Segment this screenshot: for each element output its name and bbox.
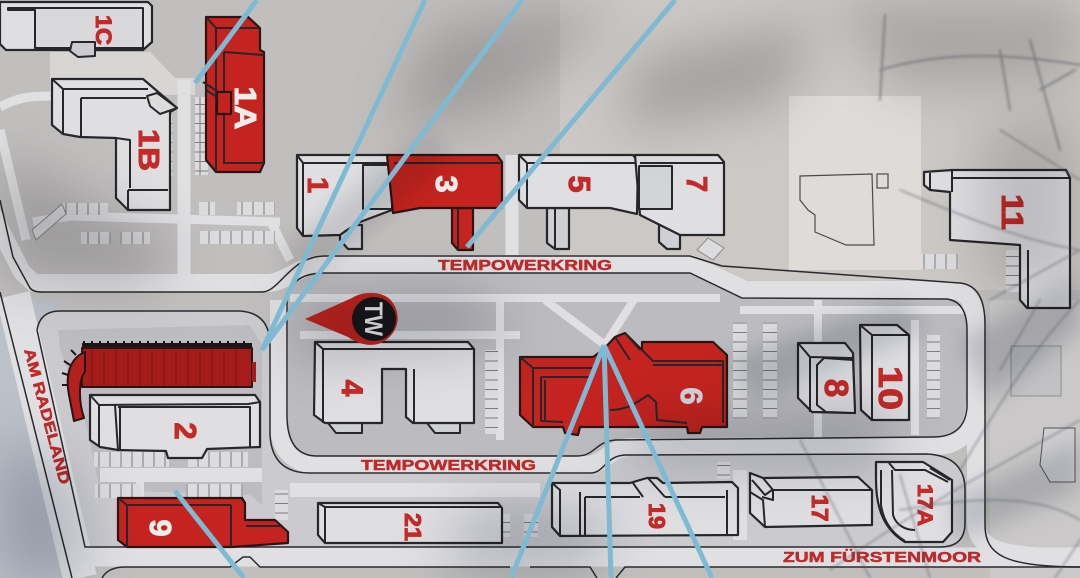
building 17A (876, 462, 952, 542)
building 1B: 1B (132, 129, 164, 171)
building 4: 4 (335, 380, 368, 397)
pointer line to long building, right (262, 0, 522, 350)
building 17 (750, 473, 872, 527)
building 3 (387, 155, 502, 250)
tree branch shadows (800, 15, 1080, 578)
building 8: 8 (818, 379, 855, 397)
building 10 (860, 325, 909, 420)
building 4 (314, 342, 474, 433)
building 1C (0, 2, 152, 57)
building 5 (519, 155, 638, 249)
pointer line to building 9 (175, 491, 244, 578)
outlined neighbouring building (800, 174, 888, 245)
building 1B (52, 79, 177, 210)
building 17A: 17A (913, 484, 936, 526)
building 9 (118, 498, 288, 547)
street label: Zum Fürstenmoor: ZUM FÜRSTENMOOR (783, 549, 981, 566)
building 1 (297, 155, 392, 249)
building 8 (798, 343, 855, 413)
building 1C: 1C (91, 15, 116, 45)
building 6 (520, 333, 727, 435)
building 1A (203, 17, 264, 172)
street label: Tempowerkring upper: TEMPOWERKRING (438, 257, 612, 274)
building 7 (635, 155, 724, 249)
street label: Tempowerkring lower: TEMPOWERKRING (361, 457, 536, 474)
light square plot (789, 96, 921, 270)
building 5: 5 (562, 175, 597, 193)
building 11 (924, 170, 1070, 308)
city blocks (37, 273, 967, 547)
building 17: 17 (807, 494, 833, 522)
building 1A: 1A (228, 86, 263, 130)
building 19 (552, 478, 738, 536)
pointer lines from building 6 (511, 345, 712, 578)
pointer line to 1A (195, 0, 257, 83)
building 6: 6 (674, 387, 709, 405)
building 21: 21 (400, 513, 426, 541)
red long building with teeth (62, 341, 256, 421)
parking bays (32, 97, 1021, 537)
road outlines (0, 200, 1080, 578)
location pin: TW (359, 302, 387, 336)
pointer line to long building, left (262, 0, 425, 350)
street label: Am Radeland: AM RADELAND (20, 347, 73, 486)
building 2 (90, 395, 260, 458)
side blocks at far right (1011, 346, 1075, 482)
building 1: 1 (301, 177, 333, 193)
location pin (305, 293, 398, 345)
building 10: 10 (872, 366, 909, 410)
building 7: 7 (680, 176, 712, 192)
building 21 (318, 503, 502, 543)
building 2: 2 (168, 422, 203, 440)
building 3: 3 (429, 175, 464, 193)
pointer line to building 3 (467, 0, 675, 247)
building 11: 11 (995, 194, 1030, 230)
building 19: 19 (644, 503, 670, 529)
building 9: 9 (143, 519, 178, 537)
